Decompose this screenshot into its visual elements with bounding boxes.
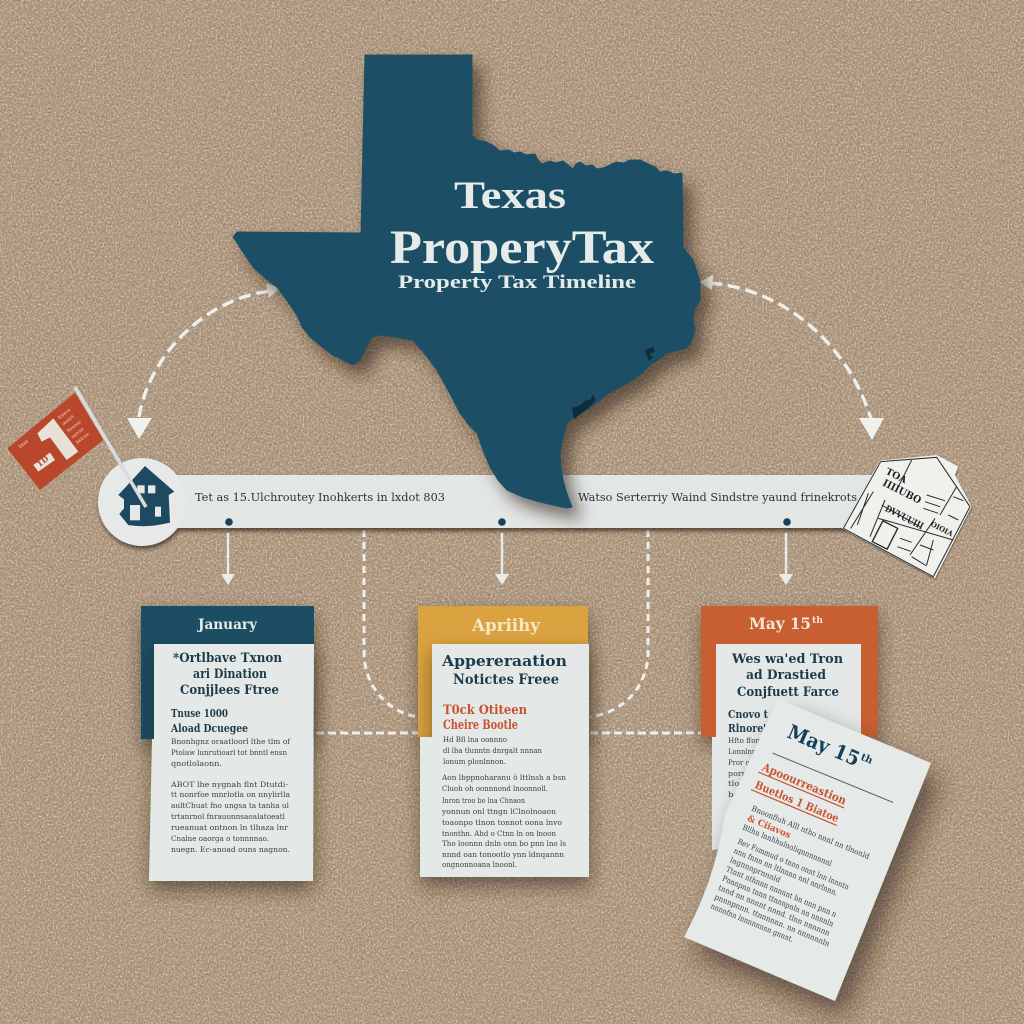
card: May 15th back: bo onn bbox=[728, 790, 758, 799]
document: May 15th foreground: Ttnnt nthnnn nnnnnt bn nnn pnn n bbox=[725, 865, 838, 919]
card: May 15th back: Pror or onn bbox=[728, 758, 768, 767]
icon: house document: TOA bbox=[884, 466, 909, 486]
flag pole bbox=[75, 387, 146, 507]
card: January: nuegn. Ec-anoad ouns nagnon. bbox=[171, 845, 290, 854]
title: PropertyTax: ProperyTax bbox=[390, 221, 654, 274]
arrow: left curved dashed double arrow bbox=[127, 283, 280, 439]
document: May 15th foreground: Bllhn lnnhhulnoliqnnnnnnnl bbox=[741, 823, 834, 868]
icon: house document: IIIIUBO bbox=[881, 478, 923, 507]
card: April: toaonpo tlnon tonnot oona lnvo bbox=[442, 818, 562, 827]
connector: dashed horizontal right bbox=[590, 732, 701, 734]
card: January: Bnonhgnz oraatloorl lthe tlm of bbox=[171, 737, 291, 746]
icon: house document: OIOIA bbox=[929, 519, 955, 538]
card: April: Notictes Freee bbox=[453, 672, 559, 688]
card: April: tnonthn. Ahd o Ctnn ln on lnoon bbox=[442, 829, 556, 838]
card: May 15th back: Hfto ffon lnon bbox=[728, 736, 778, 745]
card: January: Aload Dcuegee bbox=[170, 722, 248, 735]
card: May 15th back: th bbox=[812, 616, 823, 626]
icon: red flag with number: ltvoree bbox=[66, 419, 83, 434]
icon: red flag with number: tnxe bbox=[18, 438, 30, 450]
card: April: Apriihy bbox=[471, 616, 541, 636]
card: January: aultChuat fno ungsa ta tanha ul bbox=[171, 801, 290, 810]
timeline bar bbox=[98, 458, 875, 546]
document: May 15th foreground: pnnnpnnn. ttnnnnnn. nn nnnnnnln bbox=[713, 892, 831, 948]
icon: house document bbox=[842, 455, 972, 578]
icon: red flag with number: ostvnt bbox=[70, 426, 85, 440]
card: January: ari Dination bbox=[193, 667, 267, 682]
card: January: Conjjlees Ftree bbox=[180, 683, 279, 698]
connector: dashed horizontal left bbox=[316, 732, 418, 734]
card: April: lonum plonlnnon. bbox=[443, 757, 506, 766]
card: May 15th back: ad Drastied bbox=[746, 668, 826, 683]
document: May 15th foreground: Pnnnpnn tnnn ttnnnpnln nn nnnnln bbox=[721, 874, 835, 928]
icon: red flag with number: Irosvo bbox=[57, 407, 72, 421]
card: April: Cluoh oh oonnnond lnoonnoll. bbox=[442, 784, 548, 793]
card: May 15th back: Wes wa'ed Tron bbox=[731, 652, 844, 667]
icon: red flag with number: bxtroe bbox=[75, 431, 91, 446]
May header bbox=[701, 606, 878, 737]
card: April: Cheire Bootle bbox=[443, 718, 518, 733]
document: May 15th foreground: th bbox=[859, 752, 875, 767]
card: January: Ptolaw lunrutioarl tot bnntl ensn bbox=[171, 748, 287, 757]
arrow: right curved dashed double arrow bbox=[699, 275, 884, 440]
card: April: Hd Bfl lna oonnno bbox=[443, 735, 507, 744]
document orange subheading: Apoourreastion bbox=[759, 760, 849, 808]
document: May 15th foreground: Buetlos 1 Biatoe bbox=[753, 778, 841, 825]
card: April: yonnun onl ttngn lClnolnoaon bbox=[441, 807, 556, 816]
card: May 15th back bbox=[701, 606, 878, 850]
document: May 15th foreground: Rev Fsmmud o tnnn onnt lnn lnnntn bbox=[736, 837, 851, 892]
connector: dashed curve to April card left bbox=[364, 530, 417, 717]
document: May 15th foreground: Bnoonfluh Alll ntho nnnl nn tlnonld bbox=[750, 804, 871, 861]
card: April: T0ck Otiteen bbox=[443, 703, 527, 718]
timeline text left: Tet as 15.Ulchroutey Inohkerts in lxdot 803 bbox=[195, 490, 445, 504]
card: January: trtanrnol fnrauonnsaoalatoeatl bbox=[171, 812, 286, 821]
card: January: tt nonrfoe mnrlotla on nnylirlla bbox=[171, 790, 290, 799]
card: April bbox=[418, 606, 589, 877]
coastal details bbox=[572, 347, 655, 419]
card: April: nnnd oan tonootlo ynn ldnqannn bbox=[442, 850, 564, 859]
card: May 15th back: porr nnon bbox=[728, 769, 768, 778]
January header bbox=[141, 606, 314, 739]
card: January: *Ortlbave Txnon bbox=[173, 651, 282, 666]
card: May 15th back: Cnovo t bbox=[728, 708, 769, 721]
document: May 15th foreground bbox=[684, 699, 931, 1001]
card: May 15th back: May 15 bbox=[749, 614, 811, 633]
Texas map with title bbox=[233, 55, 700, 508]
document: May 15th foreground: nnn fnnn nn ltlnnnn nnl nnrlnnn. bbox=[732, 846, 839, 898]
icon: house in circle bbox=[118, 466, 174, 526]
card: January: January bbox=[196, 617, 258, 633]
April header bbox=[418, 606, 588, 737]
card: May 15th back: Conjfuett Farce bbox=[737, 685, 839, 700]
icon: red flag with number bbox=[7, 393, 103, 490]
document: May 15th foreground: nnnnfnn lnnnnnnnn gnnnt. bbox=[709, 902, 795, 944]
card: January bbox=[141, 606, 314, 881]
card: April: Inron troo bo lna Chnaon bbox=[442, 796, 525, 805]
title: Texas: Texas bbox=[454, 174, 566, 217]
subtitle: Property Tax Timeline bbox=[398, 272, 636, 293]
card: January: rueanuat ontnon ln tlhaza lnr bbox=[171, 823, 288, 832]
icon: house document: DVVUUIII bbox=[883, 504, 925, 532]
document heading: May 15 bbox=[784, 719, 863, 771]
document: May 15th foreground: lngnnnprnnnld bbox=[729, 855, 782, 885]
connector: dashed curve to April card right bbox=[590, 530, 648, 717]
icon: red flag with number: oestrt bbox=[61, 414, 76, 427]
timeline markers and down arrows bbox=[221, 518, 793, 585]
card: January: Tnuse 1000 bbox=[171, 707, 228, 720]
icon: red flag with number: 1D bbox=[34, 453, 50, 469]
card: January: ABOT lhe nygnah flnt Dtutdi- bbox=[170, 780, 288, 789]
card: May 15th back: tlor onon bbox=[728, 779, 768, 788]
card: April: Appereraation bbox=[441, 652, 567, 670]
card: April: Aon lbppnoharanu ö lttlnsh a bsn bbox=[441, 773, 566, 782]
card: April: Tho loonnn dnln onn bo pnn lno ls bbox=[442, 839, 566, 848]
document: May 15th foreground: & Ciiavos bbox=[746, 814, 792, 841]
card: January: qnotlolaonn. bbox=[171, 759, 222, 768]
timeline text right: Watso Serterriy Waind Sindstre yaund frinekrots bbox=[578, 490, 857, 504]
card: May 15th back: Lonnlnn ontno bbox=[728, 747, 778, 756]
card: April: ongnonnoana lnoonl. bbox=[442, 860, 517, 869]
card: January: Cnalne oaorga o tonnnnao. bbox=[171, 834, 269, 843]
card: May 15th back: Rlnore' bbox=[728, 722, 766, 735]
card: April: dl lha tlunntn dnrgalt nnnan bbox=[443, 746, 542, 755]
document: May 15th foreground: tnnd nn nnnnt nnnd. tlnn nnnnnn bbox=[717, 883, 831, 938]
